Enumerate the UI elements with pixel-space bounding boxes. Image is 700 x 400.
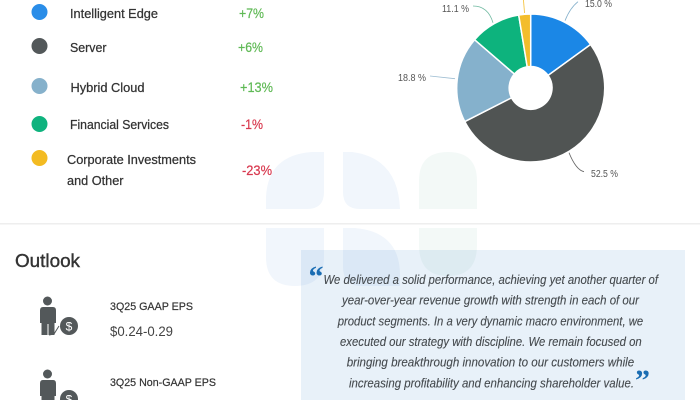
donut chart: revenue mix <box>398 0 618 180</box>
quote text: executed our strategy with discipline. We remain focused on <box>340 335 642 349</box>
legend row: Corporate Investments and Other: Corporate Investments <box>67 152 196 167</box>
legend row: Hybrid Cloud: Hybrid Cloud <box>70 80 144 95</box>
quote text: product segments. In a very dynamic macro environment, we <box>337 314 643 328</box>
slice: Corporate Investments 2.6% <box>519 14 531 67</box>
quote text <box>324 273 659 390</box>
pie labels: 11.1 % <box>442 4 469 15</box>
pie labels: 52.5 % <box>591 169 618 180</box>
icon: closing quote mark: ” <box>635 364 650 397</box>
legend row: Hybrid Cloud: +13% <box>240 80 273 95</box>
legend row: Corporate Investments and Other: and Other <box>67 173 124 188</box>
icon: person with dollar coin, GAAP: $ <box>66 320 73 334</box>
legend row: Intelligent Edge <box>32 4 264 21</box>
text: GAAP EPS outlook <box>110 301 193 339</box>
legend row: Financial Services: -1% <box>241 117 263 132</box>
watermark: background leaf shapes <box>266 152 477 286</box>
legend row: Server: Server <box>70 40 107 55</box>
legend row: Intelligent Edge: Intelligent Edge <box>70 6 158 21</box>
legend row: Financial Services <box>32 116 263 132</box>
text: GAAP EPS outlook: 3Q25 GAAP EPS <box>110 301 193 313</box>
legend row: Intelligent Edge: +7% <box>239 6 264 21</box>
heading: Outlook: Outlook <box>15 250 81 271</box>
quote text: bringing breakthrough innovation to our customers while <box>347 356 634 370</box>
icon: opening quote mark: “ <box>308 260 324 294</box>
slice: Hybrid Cloud 18.8% <box>457 40 514 122</box>
pie labels: 18.8 % <box>398 73 426 84</box>
legend row: Corporate Investments and Other: -23% <box>242 163 272 178</box>
text: Non-GAAP EPS outlook: 3Q25 Non-GAAP EPS <box>110 377 216 389</box>
slice: Server 52.5% <box>465 44 605 162</box>
quote text: year-over-year revenue growth with strength in each of our <box>341 294 640 308</box>
icon: person with dollar coin, Non-GAAP <box>40 370 78 400</box>
quote text: We delivered a solid performance, achieving yet another quarter of <box>324 273 659 287</box>
legend: segment growth <box>32 4 273 188</box>
text: GAAP EPS outlook: $0.24-0.29 <box>110 323 173 339</box>
legend row: Hybrid Cloud <box>32 78 273 95</box>
leader lines <box>430 0 584 172</box>
panel: CEO quote <box>301 250 685 400</box>
slice: Intelligent Edge 15.0% <box>531 14 591 75</box>
icon: person with dollar coin, GAAP <box>40 296 78 335</box>
legend row: Financial Services: Financial Services <box>70 117 169 132</box>
legend row: Corporate Investments and Other <box>32 150 272 188</box>
pie labels <box>398 0 618 180</box>
quote text: increasing profitability and enhancing shareholder value. <box>349 376 634 390</box>
legend row: Server <box>32 38 263 55</box>
legend row: Server: +6% <box>238 40 263 55</box>
slice: Financial Services 11.1% <box>475 15 527 74</box>
